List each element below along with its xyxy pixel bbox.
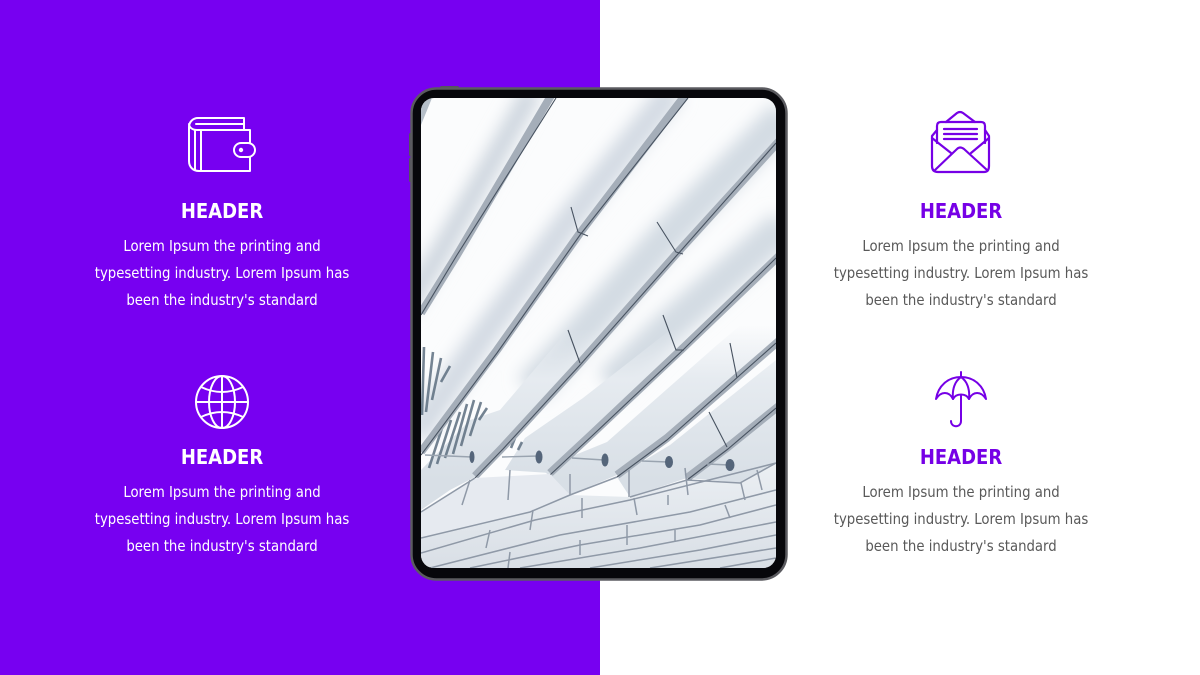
brick courses	[421, 463, 776, 568]
text block	[834, 484, 1088, 555]
text block: been the industry's standard	[126, 538, 318, 555]
icon: globe	[196, 376, 248, 428]
text block: Lorem Ipsum the printing and	[862, 238, 1060, 255]
panel: left feature wallet	[95, 118, 349, 309]
panel: right feature envelope	[834, 112, 1088, 309]
heading: HEADER	[920, 445, 1002, 469]
distant building slats	[422, 347, 522, 468]
device body	[412, 88, 786, 580]
heading: HEADER	[181, 445, 263, 469]
photo: white architecture	[405, 90, 785, 568]
heading: HEADER	[181, 199, 263, 223]
icon: umbrella	[936, 372, 986, 426]
panel: purple left background	[0, 0, 600, 675]
panel: left feature globe	[95, 376, 349, 555]
beam edges	[421, 94, 780, 480]
lamp fixtures	[425, 450, 734, 471]
panel: right feature umbrella	[834, 372, 1088, 555]
text block	[95, 238, 349, 309]
soft shaded beam faces, upper area	[405, 90, 785, 435]
lower beam faces	[421, 345, 776, 510]
text block: been the industry's standard	[865, 292, 1057, 309]
text block: typesetting industry. Lorem Ipsum has	[95, 511, 349, 528]
icon: open envelope	[932, 112, 989, 172]
text block	[834, 238, 1088, 309]
heading: HEADER	[920, 199, 1002, 223]
text block: typesetting industry. Lorem Ipsum has	[834, 511, 1088, 528]
tablet device	[405, 86, 786, 580]
device buttons	[409, 86, 459, 182]
text block: Lorem Ipsum the printing and	[123, 484, 321, 501]
text block: Lorem Ipsum the printing and	[123, 238, 321, 255]
text block: Lorem Ipsum the printing and	[862, 484, 1060, 501]
icon: wallet	[189, 118, 255, 171]
text block: typesetting industry. Lorem Ipsum has	[95, 265, 349, 282]
text block: been the industry's standard	[126, 292, 318, 309]
lower brick wall	[421, 463, 776, 568]
text block	[95, 484, 349, 555]
text block: typesetting industry. Lorem Ipsum has	[834, 265, 1088, 282]
text block: been the industry's standard	[865, 538, 1057, 555]
top-left beam fragment	[421, 98, 432, 125]
